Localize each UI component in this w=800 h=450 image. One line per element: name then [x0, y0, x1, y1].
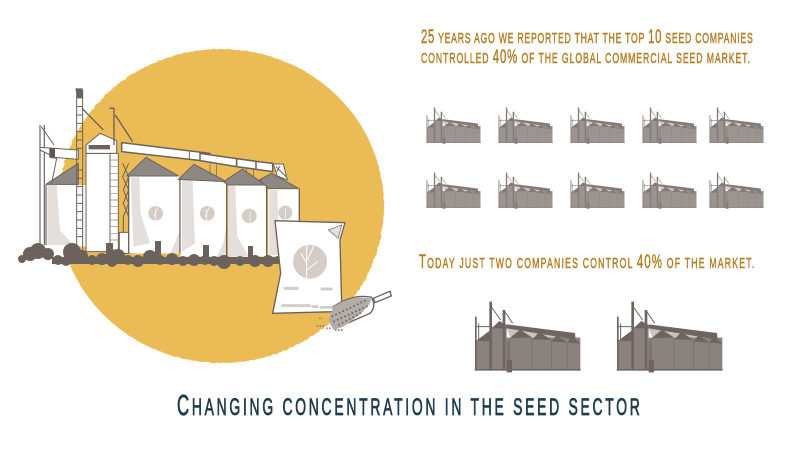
two large silos: two companies	[475, 302, 723, 372]
bottom row of silos	[426, 172, 764, 209]
illustration: seed scoop	[317, 291, 391, 330]
intro text	[421, 27, 753, 68]
top row of silos	[426, 107, 764, 144]
yellow circle	[58, 49, 384, 363]
left part of silo complex	[40, 88, 227, 257]
illustration: grain silos	[18, 88, 299, 269]
illustration: seed bag	[273, 221, 345, 313]
ten small silos: top 10 companies	[426, 107, 764, 209]
right part of silo complex	[200, 153, 299, 257]
intro text: 25 YEARS AGO WE REPORTED THAT THE TOP 10 SEED COMPANIES	[421, 27, 753, 48]
title: CHANGING CONCENTRATION IN THE SEED SECTOR	[177, 391, 640, 422]
intro text: CONTROLLED 40% OF THE GLOBAL COMMERCIAL SEED MARKET.	[421, 47, 750, 68]
today text: TODAY JUST TWO COMPANIES CONTROL 40% OF THE MARKET.	[419, 252, 754, 273]
shrubs at silo base	[18, 241, 282, 269]
